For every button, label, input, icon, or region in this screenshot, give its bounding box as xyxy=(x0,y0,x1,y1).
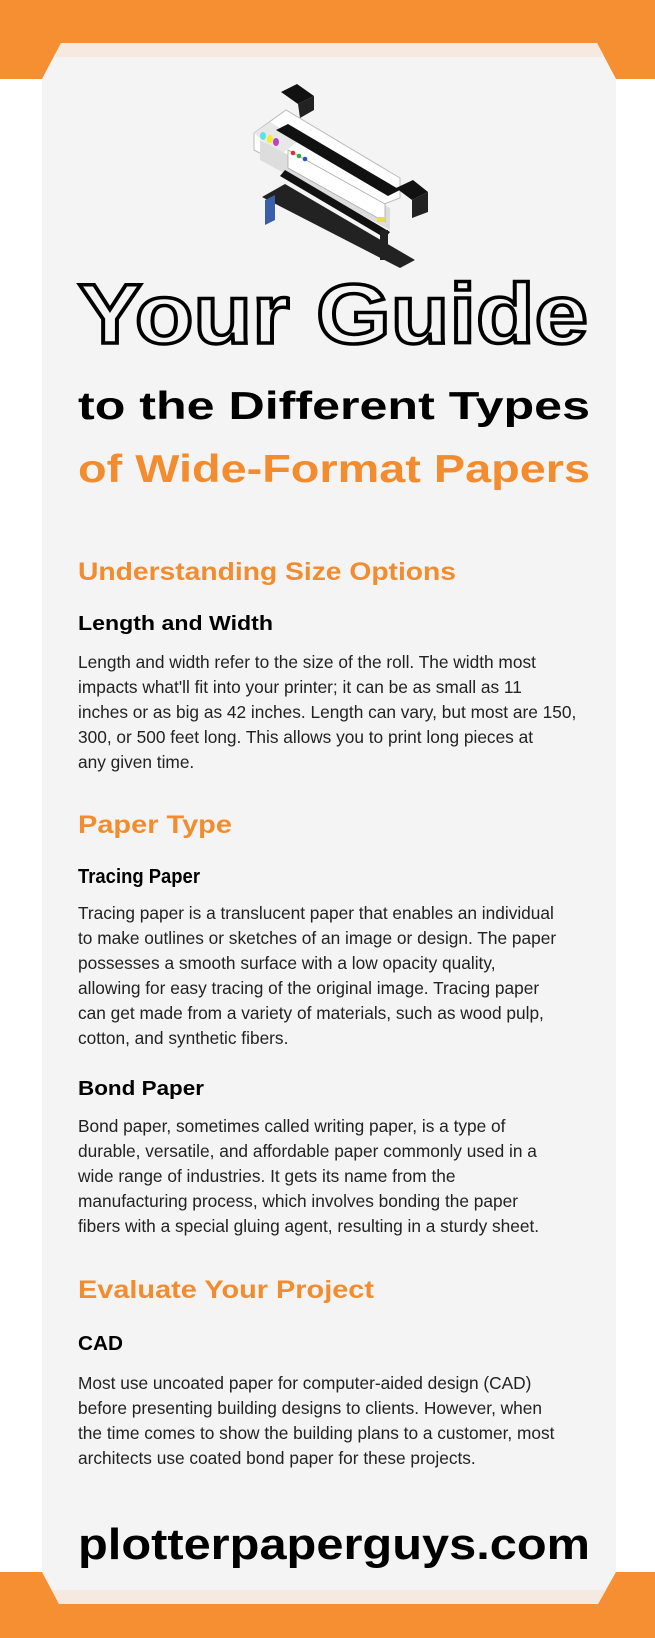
subtitle line 2: of Wide-Format Papers xyxy=(78,448,590,491)
bottom orange band xyxy=(0,1572,655,1638)
footer url: plotterpaperguys.com xyxy=(78,1520,590,1569)
section: Understanding Size Options: Length and width refer to the size of the roll. The width most xyxy=(78,652,536,672)
section: Paper Type: durable, versatile, and affordable paper commonly used in a xyxy=(78,1141,537,1161)
section: Understanding Size Options xyxy=(78,558,576,772)
section: Evaluate Your Project: CAD xyxy=(78,1333,123,1355)
section: Understanding Size Options: impacts what'll fit into your printer; it can be as small as 11 xyxy=(78,677,522,697)
subtitle line 1: to the Different Types xyxy=(78,385,590,428)
section: Evaluate Your Project xyxy=(78,1276,555,1468)
section: Evaluate Your Project: Most use uncoated paper for computer-aided design (CAD) xyxy=(78,1373,531,1393)
section: Paper Type: possesses a smooth surface with a low opacity quality, xyxy=(78,953,496,973)
section: Understanding Size Options: any given time. xyxy=(78,752,194,772)
section: Paper Type: allowing for easy tracing of the original image. Tracing paper xyxy=(78,978,539,998)
section: Paper Type: to make outlines or sketches of an image or design. The paper xyxy=(78,928,556,948)
section: Evaluate Your Project: before presenting building designs to clients. However, when xyxy=(78,1398,542,1418)
section: Paper Type: Bond paper, sometimes called writing paper, is a type of xyxy=(78,1116,506,1136)
section: Paper Type: can get made from a variety of materials, such as wood pulp, xyxy=(78,1003,544,1023)
section: Understanding Size Options: Understanding Size Options xyxy=(78,558,456,586)
section: Evaluate Your Project: the time comes to show the building plans to a customer, most xyxy=(78,1423,555,1443)
section: Paper Type: fibers with a special gluing agent, resulting in a sturdy sheet. xyxy=(78,1216,539,1236)
section: Evaluate Your Project: architects use coated bond paper for these projects. xyxy=(78,1448,476,1468)
section: Paper Type: wide range of industries. It gets its name from the xyxy=(77,1166,456,1186)
section: Understanding Size Options: Length and Width xyxy=(78,613,273,635)
section: Paper Type: Tracing paper is a translucent paper that enables an individual xyxy=(78,903,554,923)
top orange band xyxy=(0,0,655,79)
section: Understanding Size Options: inches or as big as 42 inches. Length can vary, but most are 150, xyxy=(78,702,576,722)
section: Paper Type: Tracing Paper xyxy=(78,866,200,888)
section: Paper Type xyxy=(77,811,556,1236)
section: Paper Type: manufacturing process, which involves bonding the paper xyxy=(78,1191,518,1211)
section: Evaluate Your Project: Evaluate Your Project xyxy=(78,1276,375,1304)
section: Paper Type: Paper Type xyxy=(78,811,232,839)
section: Paper Type: Bond Paper xyxy=(78,1078,204,1100)
title: Your Guide: Your Guide xyxy=(78,267,588,361)
icon: wide-format printer xyxy=(254,84,428,268)
section: Understanding Size Options: 300, or 500 feet long. This allows you to print long pieces at xyxy=(78,727,533,747)
section: Paper Type: cotton, and synthetic fibers. xyxy=(78,1028,288,1048)
